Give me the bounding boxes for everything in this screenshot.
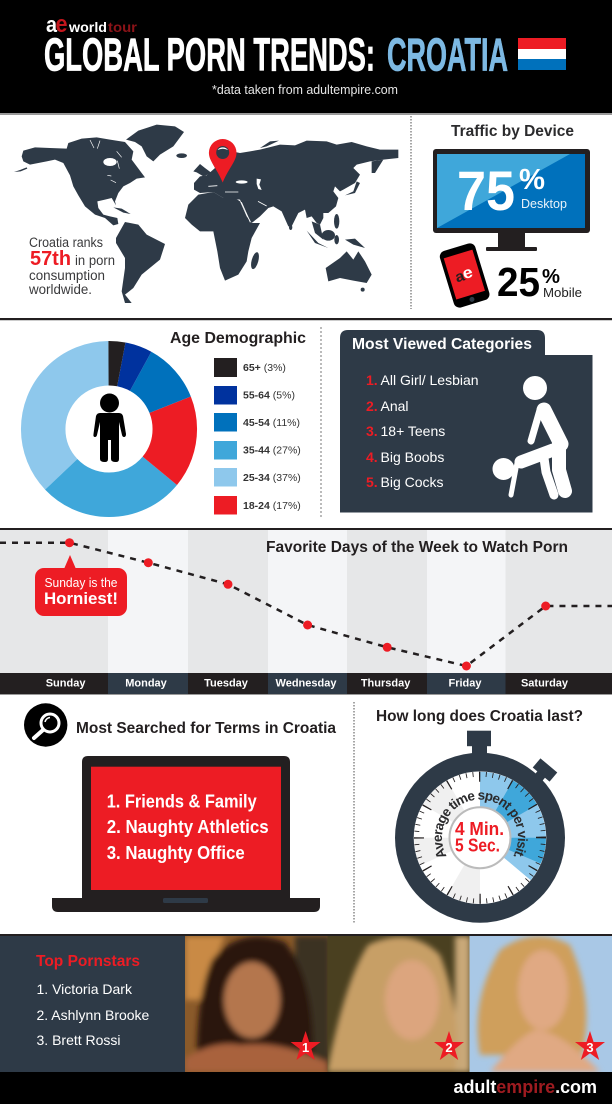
icon: stopwatch — [395, 730, 565, 923]
footer brand: adultempire.com — [454, 1077, 597, 1097]
text block: Croatia rank: worldwide. — [28, 282, 92, 297]
star 1: 1 — [302, 1040, 309, 1055]
photo placeholder 1 — [185, 936, 330, 1072]
icon: mobile phone 25% — [438, 242, 582, 309]
legend: age groups: 35-44 (27%) — [243, 444, 301, 456]
callout: Sunday is the Horniest: Horniest! — [44, 589, 118, 608]
legend: age groups: 55-64 (5%) — [243, 390, 295, 402]
weekday label bar: Thursday — [361, 678, 411, 690]
icon: desktop monitor 75% — [433, 149, 590, 251]
logo: ae world tour: tour — [108, 20, 138, 35]
icon: flag — [518, 38, 566, 70]
list: categories: Anal — [380, 398, 409, 414]
legend: age groups: 45-54 (11%) — [243, 417, 300, 429]
star 2: 2 — [445, 1040, 453, 1055]
text block: Croatia rank — [28, 235, 115, 297]
text block: Croatia rank: in porn — [75, 253, 115, 268]
weekday label bar: Friday — [448, 678, 482, 690]
logo: ae world tour: e — [56, 11, 68, 38]
icon: two figures pictogram — [492, 376, 565, 495]
list: names — [36, 981, 150, 1048]
photo placeholder 3 — [470, 936, 612, 1072]
header panel — [0, 0, 612, 115]
weekday label bar: Monday — [125, 678, 168, 690]
text block: Croatia rank: consumption — [29, 268, 105, 283]
weekday background columns — [0, 530, 612, 673]
footer — [0, 1072, 612, 1104]
list: names: 1. Victoria Dark — [36, 981, 133, 997]
world map — [14, 125, 398, 303]
list: categories: Big Cocks — [380, 474, 444, 490]
stopwatch tick marks — [416, 774, 544, 901]
heading: most viewed categories: Most Viewed Categories — [352, 336, 532, 353]
list: search terms — [107, 792, 269, 863]
star 1 — [291, 1031, 321, 1060]
logo: ae world tour — [46, 11, 138, 38]
panel: how long does Croatia last — [376, 708, 583, 923]
icon: magnifying glass — [24, 703, 67, 747]
list: categories: 4. — [366, 449, 378, 465]
icon: person — [93, 394, 126, 462]
list: categories: Big Boobs — [380, 449, 444, 465]
icon: mobile phone 25%: a — [453, 267, 467, 286]
heading: how long: How long does Croatia last? — [376, 708, 583, 725]
heading: favorite days: Favorite Days of the Week to Watch Porn — [266, 539, 568, 556]
legend: age groups: 25-34 (37%) — [243, 472, 301, 484]
panel: favorite days chart — [0, 528, 612, 695]
list: categories — [366, 372, 479, 490]
icon: laptop with search list — [52, 756, 320, 912]
heading: top pornstars: Top Pornstars — [36, 953, 140, 970]
icon: mobile phone 25%: Mobile — [543, 286, 582, 300]
heading: most searched: Most Searched for Terms in Croatia — [76, 720, 336, 737]
weekday label bar: Tuesday — [204, 678, 249, 690]
icon: mobile phone 25%: e — [460, 264, 475, 283]
legend: age groups: 65+ (3%) — [243, 362, 286, 374]
icon: desktop monitor 75%: 75 — [457, 159, 515, 222]
list: search terms: 3. Naughty Office — [107, 843, 245, 863]
panel: most searched terms — [24, 703, 336, 912]
icon: desktop monitor 75%: Desktop — [521, 196, 567, 211]
time value — [455, 818, 504, 856]
legend: age groups — [214, 358, 301, 514]
icon: mobile phone 25%: 25 — [497, 259, 540, 305]
heading: traffic by device: Traffic by Device — [451, 123, 574, 140]
weekday label bar: Sunday — [46, 678, 86, 690]
list: names: 3. Brett Rossi — [36, 1032, 121, 1048]
line chart: dashed trend — [0, 538, 612, 670]
list: categories: 5. — [366, 474, 378, 490]
star 3 — [575, 1031, 605, 1060]
logo: ae world tour: world — [68, 20, 107, 35]
icon: desktop monitor 75%: % — [519, 164, 545, 196]
title: CROATIA — [387, 28, 508, 80]
list: categories: 18+ Teens — [380, 423, 445, 439]
panel: traffic by device — [433, 123, 590, 309]
list: names: 2. Ashlynn Brooke — [36, 1007, 150, 1023]
title: GLOBAL PORN TRENDS: — [44, 28, 375, 80]
legend: age groups: 18-24 (17%) — [243, 500, 301, 512]
panel: most viewed categories — [340, 330, 592, 512]
list: search terms: 1. Friends & Family — [107, 792, 257, 812]
heading: age demographic: Age Demographic — [170, 330, 306, 347]
weekday label bar: Saturday — [521, 678, 569, 690]
logo: ae world tour: a — [46, 12, 58, 37]
curved label: average time: Average time spent per visit. — [434, 792, 528, 857]
photo placeholder 2 — [327, 936, 470, 1072]
panel: top pornstars list — [0, 936, 185, 1072]
list: categories: 3. — [366, 423, 378, 439]
icon: mobile phone 25%: % — [542, 266, 560, 288]
star 3: 3 — [586, 1040, 594, 1055]
callout: Sunday is the Horniest: Sunday is the — [44, 576, 118, 590]
stopwatch dial wedges — [447, 805, 513, 871]
data source note: *data taken from adultempire.com — [212, 83, 398, 97]
list: categories: 2. — [366, 398, 378, 414]
time value: 4 Min. — [455, 818, 504, 839]
icon: location pin on Croatia — [209, 139, 236, 182]
callout: Sunday is the Horniest — [35, 555, 127, 616]
time value: 5 Sec. — [455, 835, 500, 856]
rank stars — [291, 1031, 605, 1060]
list: categories: All Girl/ Lesbian — [380, 372, 479, 388]
text block: Croatia rank: Croatia ranks — [29, 235, 103, 250]
star 2 — [434, 1031, 464, 1060]
list: search terms: 2. Naughty Athletics — [107, 817, 269, 837]
donut chart: age demographic — [43, 363, 175, 495]
list: categories: 1. — [366, 372, 378, 388]
weekday label bar: Wednesday — [276, 678, 337, 690]
text block: Croatia rank: 57th — [30, 248, 71, 270]
weekday label bar — [0, 673, 612, 695]
